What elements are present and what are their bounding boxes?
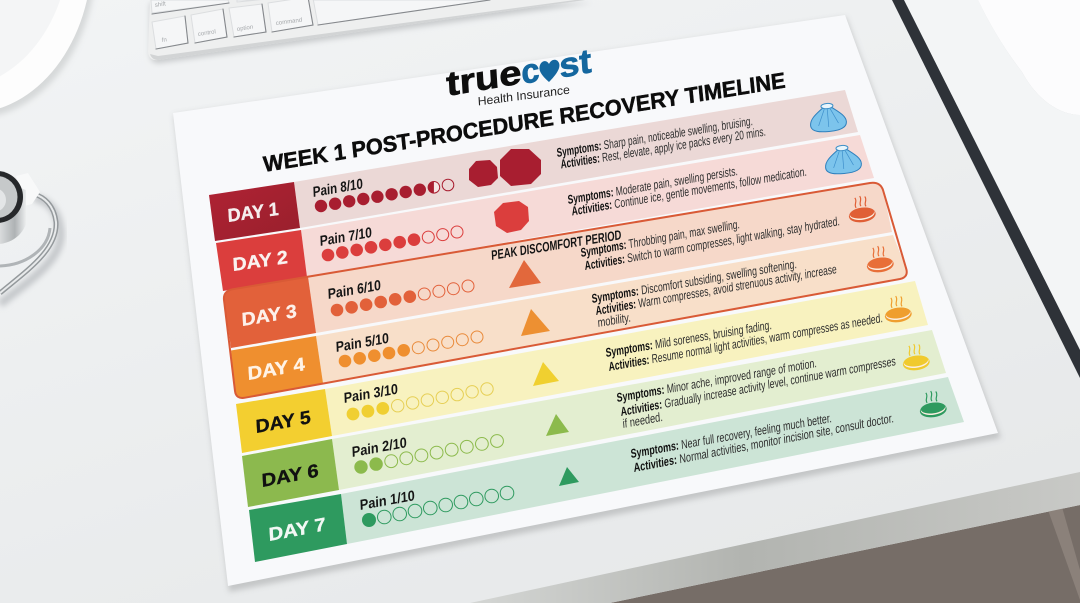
text day 1 [556, 114, 766, 171]
key labels: shift [155, 1, 166, 9]
pain shape triangle [533, 362, 559, 386]
icon: ice pack [824, 144, 862, 175]
text day 4: Symptoms: Discomfort subsiding, swelling softening. [591, 257, 797, 306]
key labels: command [276, 18, 303, 27]
text day 6: Activities: Gradually increase activity level, continue warm compresses [620, 354, 896, 419]
saucer [0, 0, 96, 118]
text day 3: Symptoms: Throbbing pain, max swelling. [580, 217, 740, 260]
icon: warm compress [864, 244, 895, 274]
keys [151, 0, 490, 49]
mouse [978, 0, 1080, 117]
key shadow edges [152, 0, 490, 49]
pain label 4: Pain 5/10 [336, 331, 389, 356]
stethoscope [0, 171, 61, 304]
floor below desk [610, 505, 1080, 603]
band day 2 [301, 135, 874, 277]
icon: warm compress [846, 194, 877, 224]
row: day 1 [209, 90, 858, 241]
pain dots 2 [322, 226, 463, 261]
day text 3: DAY 3 [241, 300, 297, 330]
text day 4: mobility. [597, 310, 631, 330]
pain shape triangle [521, 309, 550, 336]
row: day 3 [224, 183, 892, 348]
pain label 6: Pain 2/10 [352, 435, 407, 461]
pain shape triangle [546, 414, 569, 436]
desk mat right area [904, 0, 1080, 350]
mouse body [978, 0, 1080, 115]
label day 6 [242, 439, 339, 507]
paper shadow [174, 17, 1001, 592]
pain shape octagon [494, 201, 529, 233]
text day 6: if needed. [622, 410, 663, 431]
key labels: control [198, 29, 216, 38]
text day 3: Activities: Switch to warm compresses, light walking, stay hydrated. [584, 214, 840, 273]
pain label 3: Pain 6/10 [328, 278, 381, 303]
pain dots 5 [347, 383, 493, 420]
pain shape small octagon [469, 160, 498, 187]
icon: warm compress [917, 389, 948, 419]
pain shape triangle [559, 467, 579, 486]
pain label 1: Pain 8/10 [313, 176, 363, 201]
label day 4 [231, 336, 323, 398]
text day 5: Symptoms: Mild soreness, bruising fading. [605, 318, 772, 360]
text day 4 [591, 257, 837, 330]
icon: warm compress [900, 342, 931, 372]
desk leg hint [1043, 493, 1080, 600]
text day 7 [630, 411, 894, 475]
label day 7 [249, 494, 347, 562]
text day 2: Activities: Continue ice, gentle movements, follow medication. [571, 165, 807, 218]
label day 1 [209, 182, 300, 241]
pain dots 4 [339, 331, 483, 367]
band day 6 [332, 330, 946, 490]
logo subtitle: Health Insurance [477, 83, 570, 108]
day text 7: DAY 7 [268, 513, 326, 545]
text day 3 [580, 214, 840, 273]
pain shape large octagon [500, 149, 541, 186]
key labels: option [237, 25, 254, 33]
band day 4 [316, 235, 907, 383]
pain label 7: Pain 1/10 [360, 488, 415, 514]
logo heart [539, 60, 559, 82]
peak discomfort label: PEAK DISCOMFORT PERIOD [491, 227, 622, 263]
label day 5 [236, 389, 332, 453]
paper sheet [173, 15, 998, 586]
band day 5 [325, 281, 928, 436]
row: day 6 [242, 330, 946, 507]
text day 5: Activities: Resume normal light activities, warm compresses as needed. [608, 311, 883, 374]
icon: warm compress [882, 294, 913, 324]
logo letters st: st [558, 42, 593, 86]
title: WEEK 1 POST-PROCEDURE RECOVERY TIMELINE [262, 68, 786, 177]
text day 2 [567, 164, 807, 218]
day text 6: DAY 6 [261, 460, 319, 491]
band day 3 [308, 183, 892, 333]
desk front edge [470, 472, 1080, 603]
pain dots 1 [315, 179, 454, 212]
row: day 7 [249, 377, 964, 562]
key labels [155, 1, 303, 44]
row: day 2 [216, 135, 874, 291]
text day 1: Symptoms: Sharp pain, noticeable swelling, bruising. [556, 114, 753, 160]
logo word true: true [445, 53, 522, 104]
text day 2: Symptoms: Moderate pain, swelling persists. [567, 164, 738, 207]
text day 6: Symptoms: Minor ache, improved range of motion. [616, 356, 817, 405]
black binder strip [892, 0, 1080, 378]
row: day 5 [236, 281, 928, 453]
pain dots 3 [331, 280, 474, 316]
pain dots 7 [362, 486, 514, 527]
pain label 5: Pain 3/10 [344, 382, 398, 407]
day text 1: DAY 1 [227, 198, 279, 226]
day text 4: DAY 4 [247, 353, 306, 384]
pain label 2: Pain 7/10 [320, 225, 372, 250]
logo letter c: c [520, 51, 540, 92]
band day 1 [294, 90, 858, 228]
text day 4: Activities: Warm compresses, avoid strenuous activity, increase [595, 262, 837, 318]
row: day 4 [231, 235, 907, 398]
peak discomfort outline [224, 183, 907, 398]
text day 6 [616, 354, 896, 431]
band day 7 [341, 377, 964, 544]
label day 2 [216, 230, 307, 291]
keyboard [148, 0, 592, 63]
pain shape triangle [509, 260, 541, 288]
day text 2: DAY 2 [232, 246, 288, 275]
text day 5 [605, 311, 883, 374]
key labels: fn [162, 37, 167, 44]
pain dots 6 [354, 435, 503, 474]
icon: ice pack [809, 102, 847, 133]
logo [445, 42, 593, 108]
text day 7: Activities: Normal activities, monitor incision site, consult doctor. [633, 411, 894, 475]
text day 7: Symptoms: Near full recovery, feeling much better. [630, 411, 832, 461]
label day 3 [224, 277, 316, 348]
text day 1: Activities: Rest, elevate, apply ice packs every 20 mins. [560, 125, 766, 171]
day text 5: DAY 5 [255, 406, 311, 437]
